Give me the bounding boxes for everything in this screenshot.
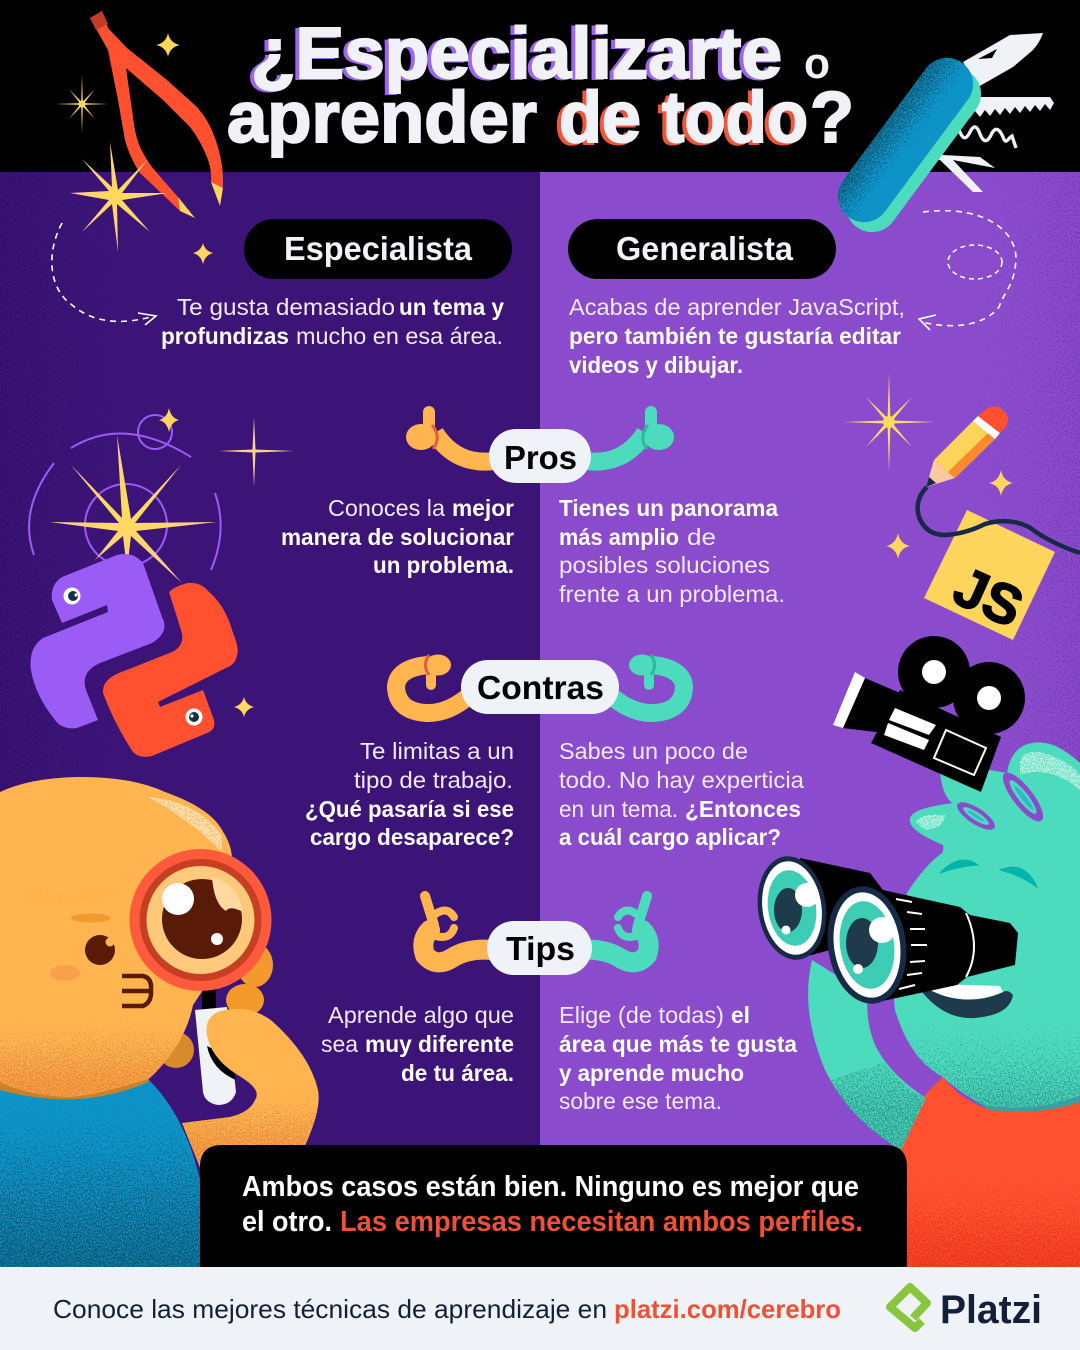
binoculars (751, 852, 1018, 1009)
sparkle (159, 408, 179, 432)
sparkle (156, 33, 180, 57)
body shirt (0, 1079, 200, 1267)
text: pros specialist (281, 495, 514, 578)
text: pros specialist: un problema. (373, 552, 514, 578)
footer (0, 1267, 1080, 1350)
text: tips generalist: Elige (de todas) (559, 1002, 724, 1028)
icon: python logo purple (30, 554, 164, 728)
title: todo (662, 78, 808, 158)
sparkle (989, 470, 1013, 496)
text: contras generalist: todo. No hay experticia (559, 767, 804, 793)
text: contras generalist: en un tema. (559, 796, 678, 822)
badge: Contras: Contras (477, 669, 604, 706)
text: tips generalist: el (731, 1002, 750, 1028)
fingers behind magnifier (158, 943, 273, 1068)
title: o (804, 39, 830, 88)
background: generalist panel (540, 172, 1080, 1272)
eye (85, 935, 115, 965)
dashed arrow right (919, 211, 1016, 330)
text: pros generalist: de (687, 524, 716, 550)
icon: film camera (833, 636, 1025, 792)
text: contras generalist: Sabes un poco de (559, 738, 748, 764)
badge: Especialista: Especialista (284, 230, 473, 267)
badge: Generalista (568, 219, 836, 279)
closing message box: Las empresas necesitan ambos perfiles. (340, 1206, 863, 1238)
text: pros generalist: posibles soluciones (559, 552, 770, 578)
icon: JS square (924, 510, 1055, 640)
text: tips specialist (321, 1002, 514, 1086)
badge: Generalista: Generalista (616, 230, 794, 267)
badge: Contras (461, 660, 619, 714)
icon: ok hand orange (423, 896, 492, 962)
badge: Pros (489, 429, 591, 483)
text: tips generalist (559, 1002, 797, 1114)
text: tips specialist: Aprende algo que (328, 1002, 514, 1028)
dashed arrow left (52, 223, 156, 325)
character: generalist with binoculars (751, 742, 1080, 1267)
title: ? (810, 78, 854, 158)
icon: python star and orbits (29, 415, 221, 583)
title: ¿Especializarte (251, 14, 782, 94)
sparkle thin cross (219, 417, 294, 487)
icon: thumb up orange (406, 412, 495, 462)
title: aprender (227, 78, 537, 158)
text: pros specialist: manera de solucionar (281, 524, 514, 550)
text: contras generalist: ¿Entonces (685, 796, 801, 822)
badge: Especialista (244, 219, 512, 279)
text: tips specialist: de tu área. (401, 1060, 514, 1086)
text: tips specialist: sea (321, 1031, 358, 1057)
icon: swiss army knife (838, 33, 1054, 232)
icon: pencil (926, 407, 1008, 487)
text: tips generalist: y aprende mucho (559, 1060, 744, 1086)
text: pros specialist: mejor (452, 495, 514, 521)
title band (0, 0, 1080, 172)
eyebrow (71, 914, 111, 922)
icon: thumb up teal (585, 412, 674, 462)
sparkle star big (70, 142, 168, 252)
text: especialista description: un tema y (399, 294, 504, 320)
hand (182, 1009, 319, 1180)
magnifier handle (195, 985, 236, 1105)
closing message box: el otro. (242, 1206, 332, 1238)
text: generalista description: Acabas de aprender JavaScript, (569, 294, 905, 320)
smile (922, 984, 1013, 1018)
icon: JS square: JS (945, 554, 1032, 639)
neck shadow (0, 1075, 150, 1099)
eyebrows (940, 860, 1037, 887)
text: contras specialist: Te limitas a un (360, 738, 514, 764)
magnifier lens (130, 849, 272, 991)
text: especialista description: profundizas (161, 323, 289, 349)
cable (918, 487, 1080, 553)
logo: Platzi: Platzi (940, 1288, 1042, 1332)
icon: ok hand teal (580, 896, 649, 962)
closing message box (200, 1145, 907, 1267)
badge: Tips (487, 921, 592, 975)
logo: Platzi (890, 1287, 1042, 1332)
footer: platzi.com/cerebro (614, 1294, 841, 1324)
text: generalista description (569, 294, 905, 378)
text: contras generalist: a cuál cargo aplicar? (559, 824, 781, 850)
icon: python logo red (103, 583, 238, 757)
text: contras specialist: cargo desaparece? (310, 824, 514, 850)
shirt (890, 1077, 1080, 1267)
title: de (559, 78, 641, 158)
sparkle (886, 533, 910, 559)
text: especialista description: mucho en esa área. (296, 323, 503, 349)
icon: nippers (90, 11, 223, 218)
text: contras specialist: tipo de trabajo. (354, 767, 513, 793)
text: tips generalist: área que más te gusta (559, 1031, 797, 1057)
sparkle (193, 243, 213, 264)
text: especialista description: Te gusta demasiado (177, 294, 395, 320)
head (0, 777, 240, 1097)
text: especialista description (161, 294, 504, 349)
text: generalista description: videos y dibujar. (569, 352, 743, 378)
background: specialist panel (0, 172, 540, 1272)
sparkle star small (56, 74, 108, 134)
sparkle (234, 697, 254, 717)
mouth (122, 976, 151, 1006)
icon: thumb down teal (610, 654, 684, 713)
text: contras specialist (305, 738, 514, 850)
text: pros generalist: frente a un problema. (559, 581, 785, 607)
text: tips specialist: muy diferente (365, 1031, 514, 1057)
badge: Pros: Pros (504, 439, 577, 476)
head (893, 742, 1080, 1112)
text: generalista description: pero también te gustaría editar (569, 323, 901, 349)
text: pros generalist: más amplio (559, 524, 679, 550)
character: specialist with magnifier (0, 777, 319, 1267)
text: pros specialist: Conoces la (328, 495, 445, 521)
sparkle star right (843, 372, 935, 472)
text: tips generalist: sobre ese tema. (559, 1088, 722, 1114)
cheek (50, 965, 80, 981)
text: contras specialist: ¿Qué pasaría si ese (305, 796, 514, 822)
arm (808, 960, 926, 1150)
text: contras generalist (559, 738, 804, 850)
closing message box: Ambos casos están bien. Ninguno es mejor que (242, 1171, 859, 1203)
text: pros generalist: Tienes un panorama (559, 495, 778, 521)
title (227, 14, 854, 158)
badge: Tips: Tips (506, 930, 575, 967)
text: pros generalist (559, 495, 785, 607)
footer: Conoce las mejores técnicas de aprendizaje en (53, 1294, 607, 1324)
icon: thumb down orange (396, 654, 470, 713)
